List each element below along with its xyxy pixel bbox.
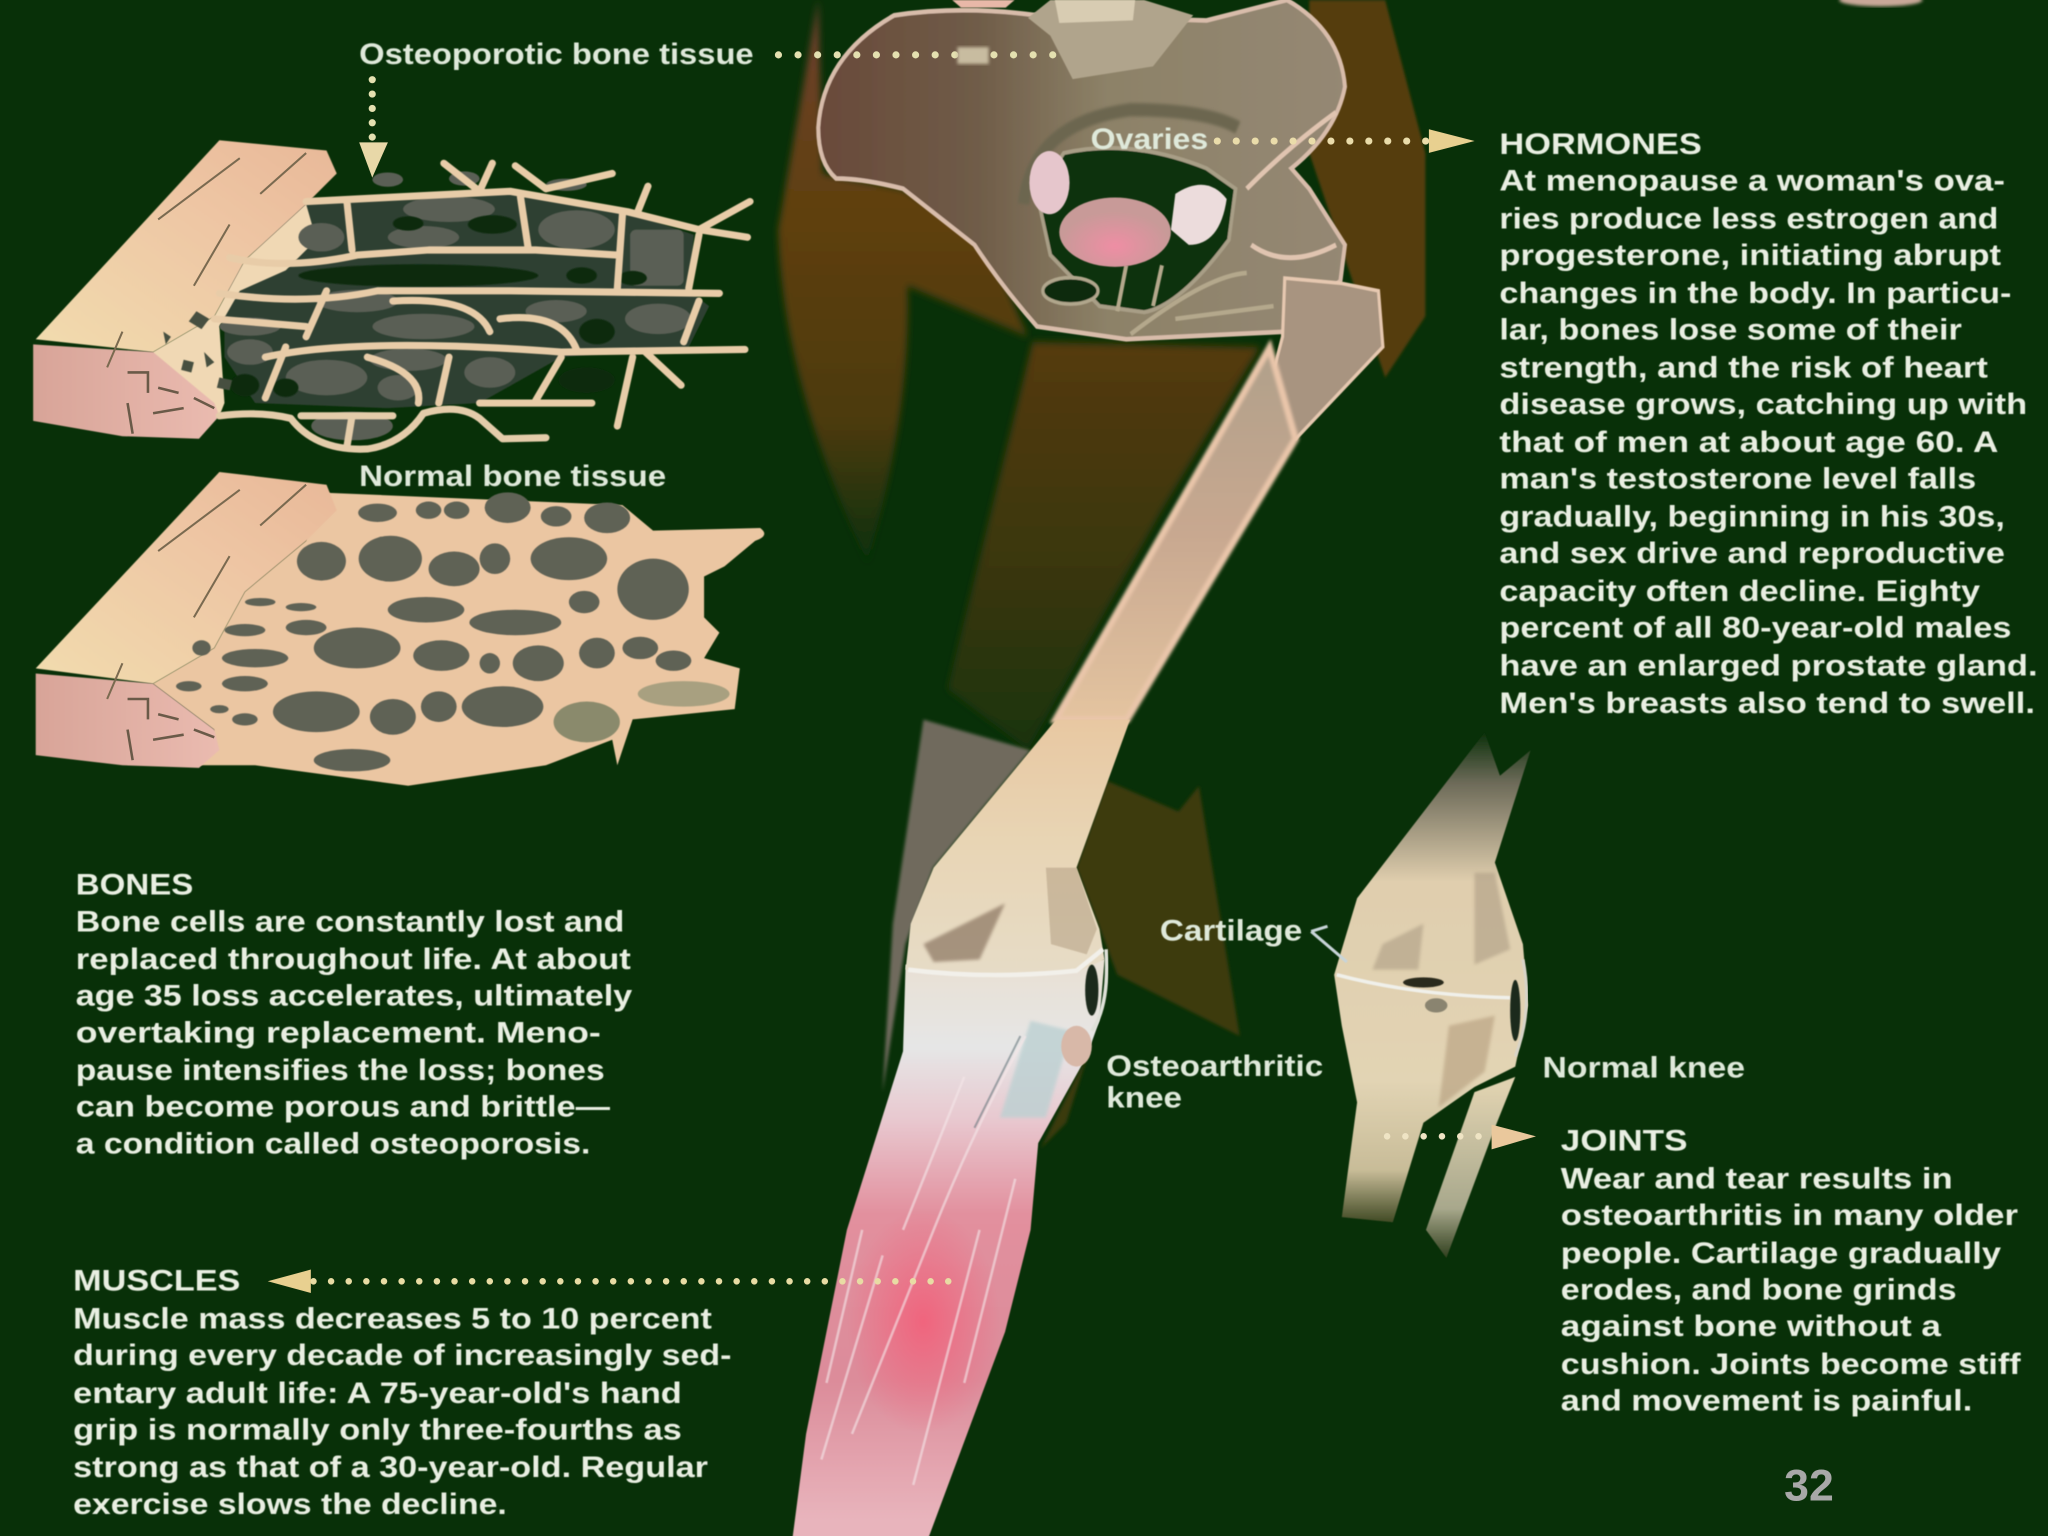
text block: joints: people. Cartilage gradually <box>1561 1237 2002 1270</box>
text block: hormones: capacity often decline. Eighty <box>1499 575 1981 608</box>
icon: pink tissue at top right edge <box>1839 0 1923 7</box>
text block: hormones: ries produce less estrogen and <box>1499 203 1998 236</box>
label: ovaries: Ovaries <box>1091 123 1208 156</box>
text block: muscles: entary adult life: A 75-year-old's hand <box>73 1377 682 1410</box>
text block: hormones: have an enlarged prostate gland. <box>1499 649 2038 682</box>
text block: hormones: Men's breasts also tend to swell. <box>1499 687 2035 720</box>
text block: joints: Wear and tear results in <box>1561 1163 1953 1196</box>
text block: muscles: grip is normally only three-fourths as <box>73 1413 682 1446</box>
text block: muscles: during every decade of increasingly sed- <box>73 1339 731 1372</box>
text block: hormones <box>1499 128 2038 720</box>
text block: bones: replaced throughout life. At about <box>76 943 631 976</box>
text block: joints: JOINTS <box>1561 1125 1688 1158</box>
dotted arrow: leg to muscles <box>268 1270 951 1293</box>
text block: hormones: At menopause a woman's ova- <box>1499 165 2005 198</box>
text block: hormones: man's testosterone level falls <box>1499 462 1976 495</box>
text block: hormones: disease grows, catching up with <box>1499 388 2027 421</box>
text block: hormones: strength, and the risk of heart <box>1499 351 1988 384</box>
text block: muscles: exercise slows the decline. <box>73 1488 507 1521</box>
dotted arrow: ovaries to hormones <box>1217 129 1475 153</box>
icon: osteoporotic bone block <box>33 140 750 449</box>
uterus <box>1059 197 1171 267</box>
text block: bones: pause intensifies the loss; bones <box>76 1054 605 1087</box>
text block: bones: BONES <box>76 869 193 902</box>
icon: pelvis with ovaries and uterus <box>818 0 1383 439</box>
text block: bones: a condition called osteoporosis. <box>76 1127 590 1160</box>
text block: muscles: Muscle mass decreases 5 to 10 percent <box>73 1302 712 1335</box>
text block: hormones: that of men at about age 60. A <box>1499 426 1998 459</box>
ovary right <box>1171 185 1227 245</box>
page number: 32 <box>1784 1462 1834 1511</box>
text block: bones: can become porous and brittle— <box>76 1091 611 1124</box>
text block: muscles: MUSCLES <box>73 1264 240 1297</box>
text block: hormones: gradually, beginning in his 30s, <box>1499 500 2005 533</box>
text block: hormones: changes in the body. In particu- <box>1499 277 2011 310</box>
text block: joints: cushion. Joints become stiff <box>1561 1348 2021 1381</box>
text block: muscles: strong as that of a 30-year-old. Regular <box>73 1451 708 1484</box>
text block: bones: Bone cells are constantly lost and <box>76 905 624 938</box>
text block: hormones: progesterone, initiating abrupt <box>1499 239 2001 272</box>
dotted arrow: knee to joints <box>1387 1125 1536 1149</box>
text block: bones: overtaking replacement. Meno- <box>76 1016 601 1049</box>
femur head <box>1256 278 1383 439</box>
text block: joints: against bone without a <box>1561 1310 1942 1343</box>
text block: bones: age 35 loss accelerates, ultimately <box>76 980 633 1013</box>
icon: normal bone block <box>36 472 764 786</box>
dotted leader: osteoporotic bone tissue horizontal <box>778 47 1061 64</box>
text block: joints: erodes, and bone grinds <box>1561 1274 1957 1307</box>
label: osteoarthritic knee <box>1106 1050 1323 1115</box>
text block: hormones: lar, bones lose some of their <box>1499 314 1962 347</box>
text block: joints: and movement is painful. <box>1561 1385 1972 1418</box>
dotted arrow: osteoporotic tissue down <box>359 80 388 178</box>
icon: femur shaft <box>1055 347 1296 720</box>
text block: joints <box>1561 1125 2021 1418</box>
text block: joints: osteoarthritis in many older <box>1561 1199 2018 1232</box>
text block: muscles <box>73 1264 731 1521</box>
label: normal knee: Normal knee <box>1543 1052 1745 1085</box>
icon: osteoarthritic knee and lower leg <box>791 720 1240 1536</box>
text block: hormones: and sex drive and reproductive <box>1499 537 2005 570</box>
label: osteoarthritic knee: knee <box>1106 1082 1182 1115</box>
label: normal bone tissue: Normal bone tissue <box>359 460 666 493</box>
text block: hormones: percent of all 80-year-old males <box>1499 611 2011 644</box>
label: osteoporotic bone tissue: Osteoporotic bone tissue <box>359 38 754 71</box>
label: cartilage: Cartilage <box>1160 914 1302 947</box>
text block: bones <box>76 869 633 1160</box>
ovary left <box>1029 151 1070 214</box>
text block: hormones: HORMONES <box>1499 128 1702 161</box>
body silhouette <box>778 0 1425 750</box>
label: osteoarthritic knee: Osteoarthritic <box>1106 1050 1323 1083</box>
icon: normal knee <box>1311 732 1531 1258</box>
